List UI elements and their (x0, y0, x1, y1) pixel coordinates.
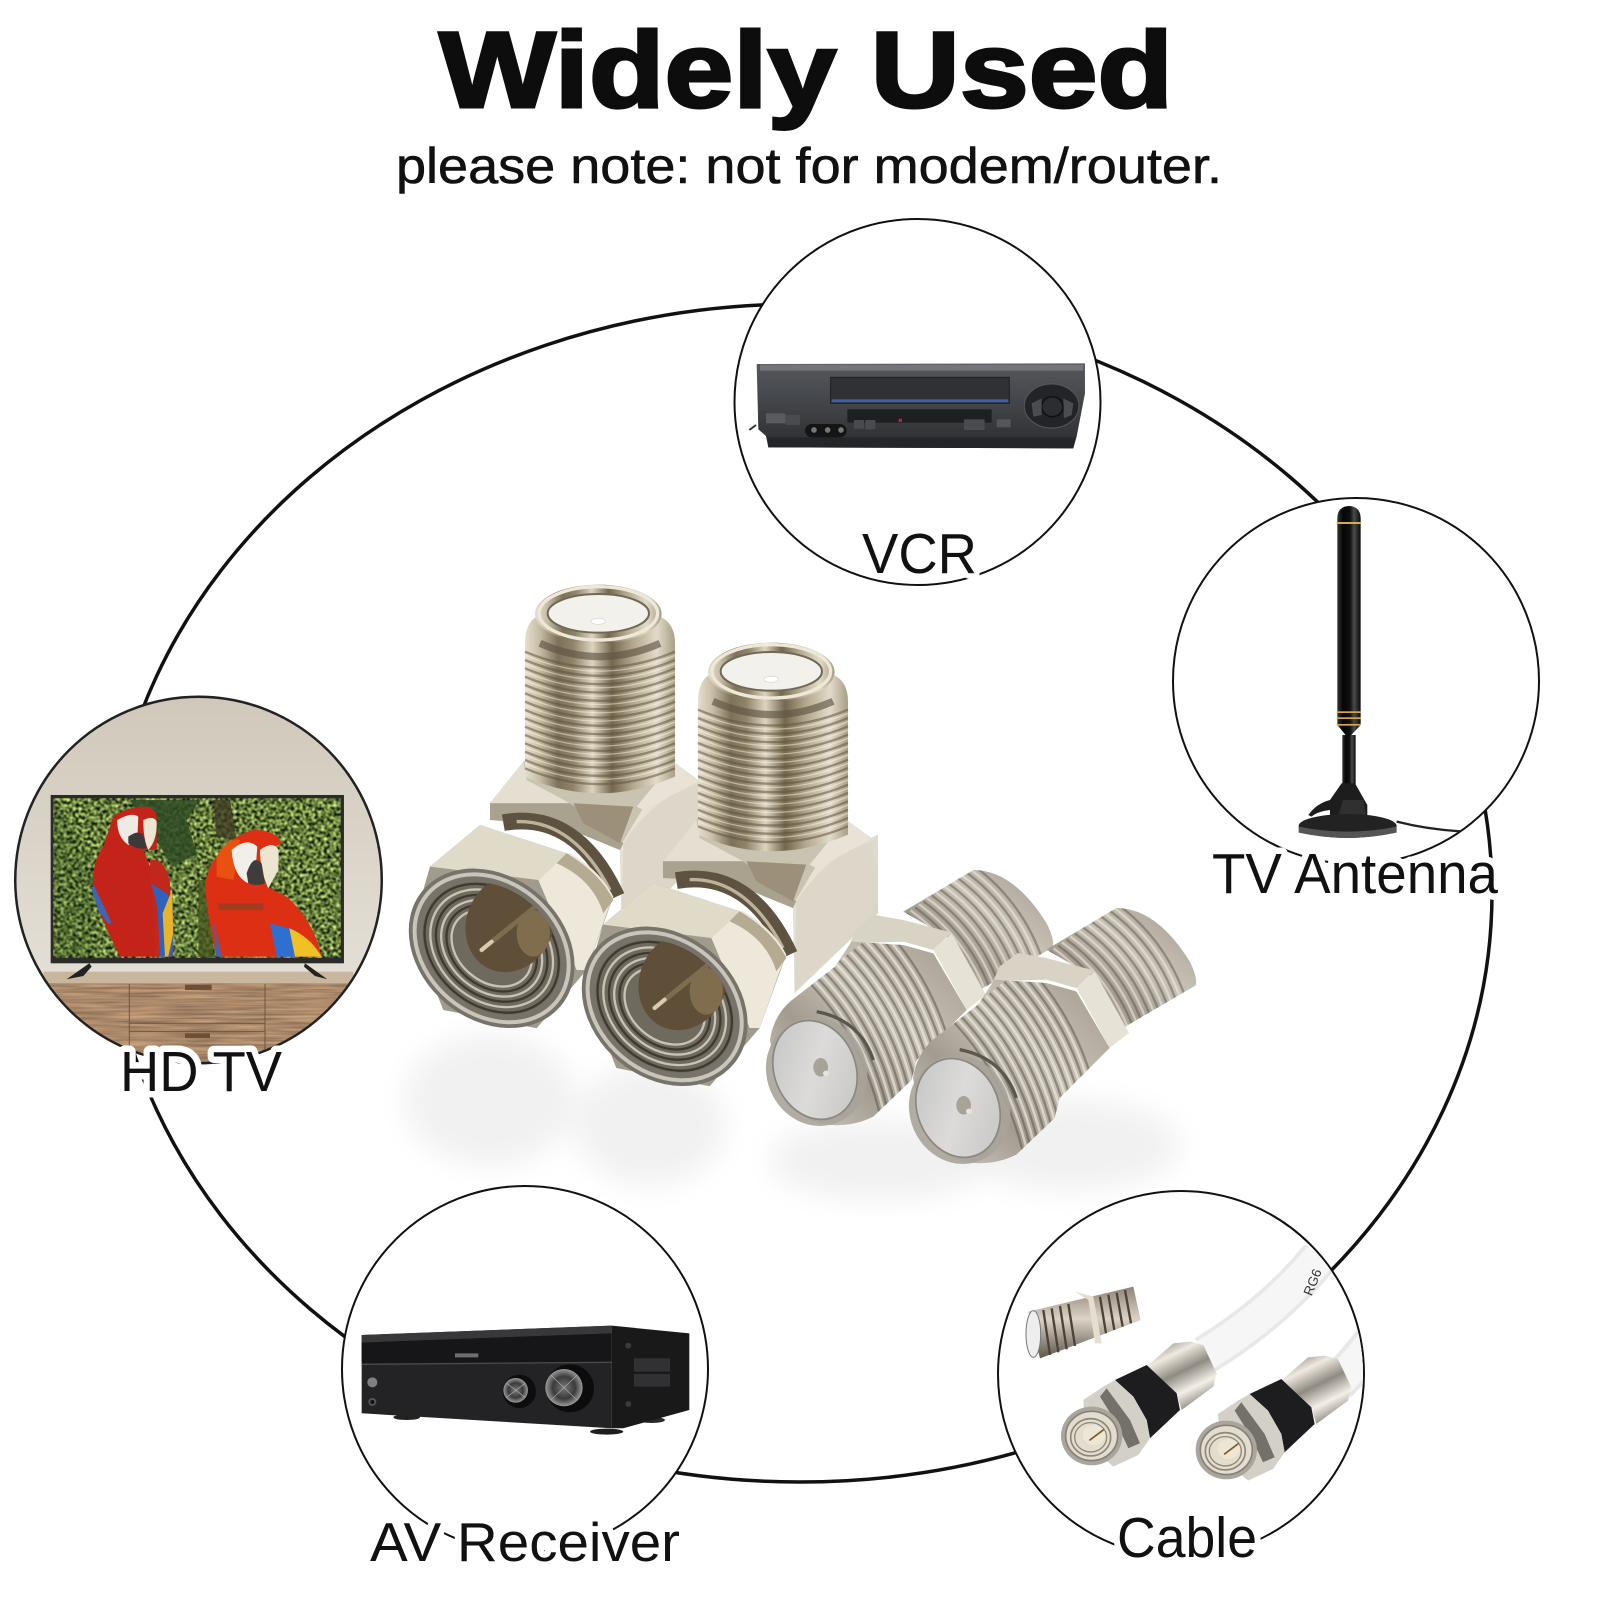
icon: TV on cabinet (0, 697, 400, 1063)
straight coupler rear (750, 865, 1053, 1141)
cable print: RG6 (1301, 1267, 1325, 1298)
label: Cable: Cable (1117, 1506, 1257, 1570)
title: Widely Used (439, 9, 1173, 130)
connecting ring (108, 304, 1492, 1482)
panel: Cable (998, 1191, 1377, 1570)
icon: VCR player (749, 363, 1085, 448)
panel: HD TV (0, 697, 400, 1104)
icon: coaxial cables and coupler (1026, 1257, 1377, 1481)
panel: VCR (734, 219, 1100, 586)
icon: antenna (1299, 506, 1460, 838)
label: TV Antenna: TV Antenna (1212, 842, 1498, 906)
label: HD TV: HD TV (120, 1040, 282, 1104)
right-angle connector left (377, 585, 705, 1061)
straight coupler front (893, 903, 1196, 1179)
icon: AV receiver (362, 1326, 689, 1435)
subtitle note: please note: not for modem/router. (396, 138, 1222, 194)
label: AV Receiver: AV Receiver (370, 1511, 680, 1573)
panel: AV Receiver (342, 1186, 708, 1573)
reflection (405, 1035, 1180, 1200)
product: coaxial connectors (377, 585, 1196, 1200)
panel: TV Antenna (1173, 498, 1539, 906)
label: VCR: VCR (862, 522, 977, 586)
right-angle connector right (550, 643, 878, 1119)
